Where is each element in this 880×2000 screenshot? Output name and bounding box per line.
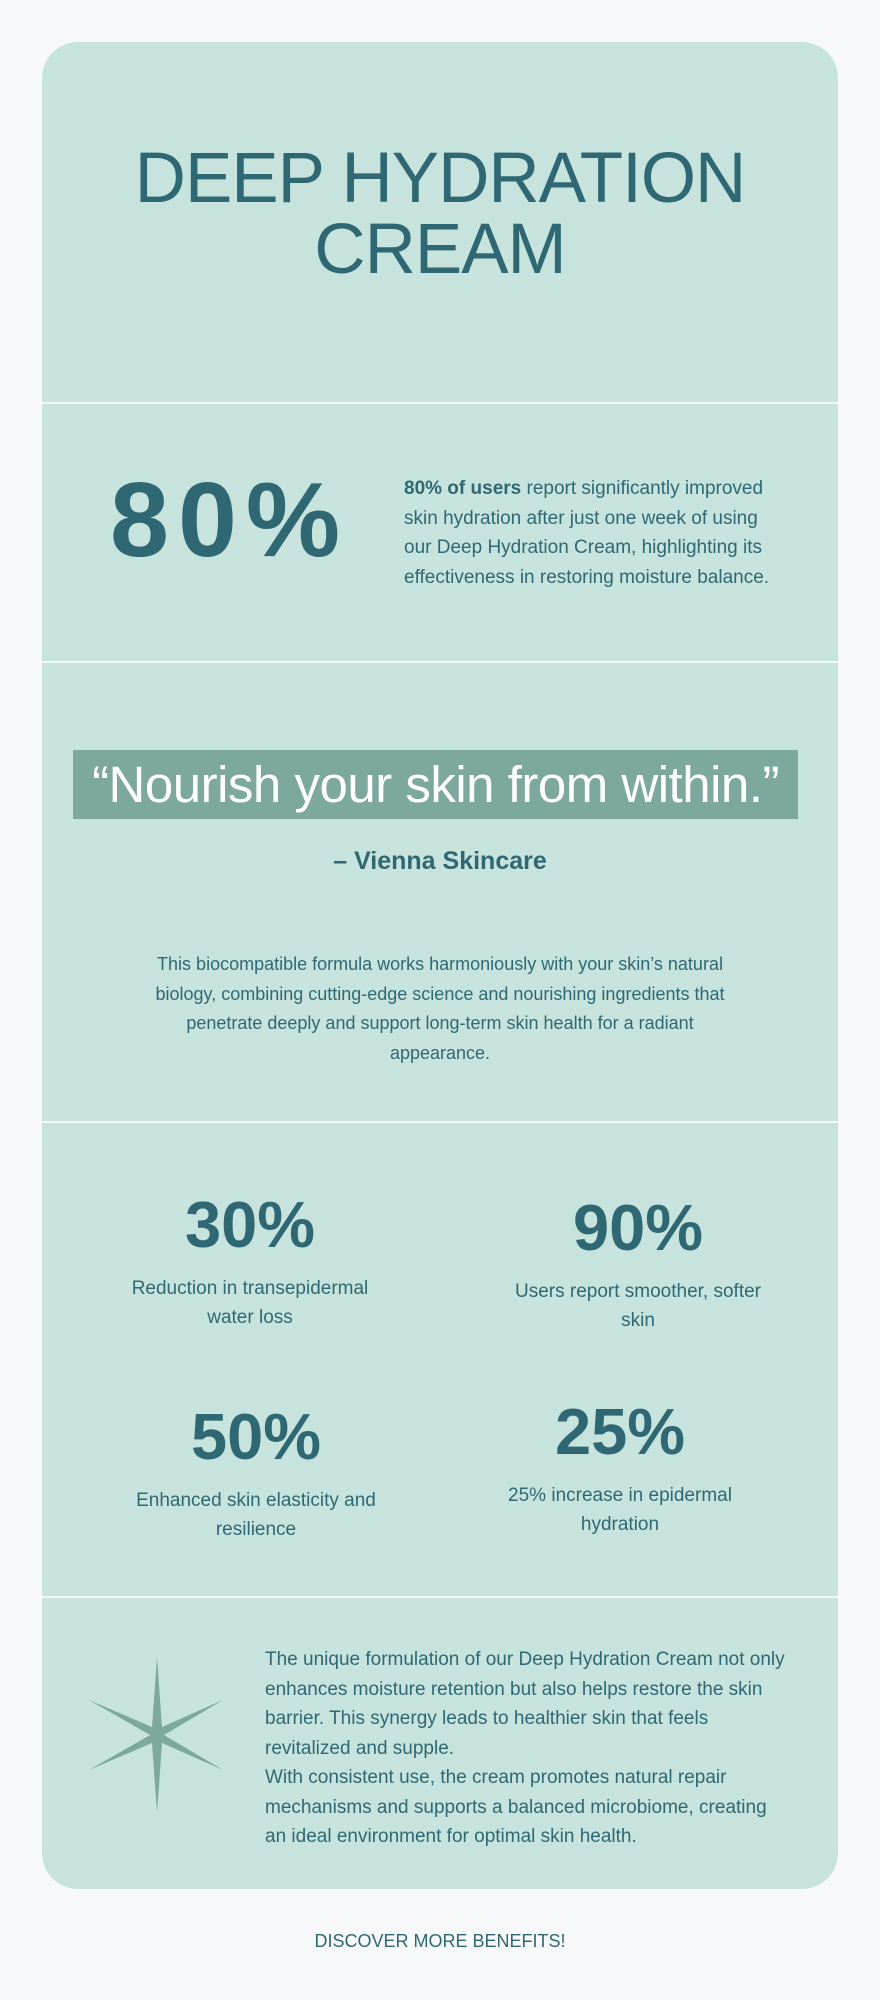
- closing paragraph: With consistent use, the cream promotes natural repair mechanisms and supports a balanced microbiome, creating an ideal environment for optimal skin health.: [265, 1767, 767, 1847]
- closing paragraph: The unique formulation of our Deep Hydration Cream not only enhances moisture retention but also helps restore the skin barrier. This synergy leads to healthier skin that feels revitalized and supple.: [265, 1649, 785, 1758]
- footer call to action: DISCOVER MORE BENEFITS!: [314, 1931, 566, 1951]
- formula paragraph: This biocompatible formula works harmoniously with your skin’s natural biology, combining cutting-edge science and nourishing ingredients that penetrate deeply and support long-term skin health for a radiant appearance.: [155, 954, 725, 1062]
- stat 30%: [132, 1188, 368, 1328]
- title: DEEP HYDRATION: [135, 139, 745, 218]
- stat 50%: resilience: [216, 1519, 296, 1540]
- closing paragraph: [265, 1649, 785, 1847]
- stat 30%: water loss: [207, 1307, 293, 1328]
- quote band: “Nourish your skin from within.”: [92, 756, 779, 813]
- stat 50%: Enhanced skin elasticity and: [136, 1490, 376, 1511]
- stat 30%: Reduction in transepidermal: [132, 1278, 368, 1299]
- stat 30%: 30%: [185, 1188, 315, 1261]
- stat 25%: 25%: [555, 1395, 685, 1468]
- title: [135, 139, 745, 289]
- stat 25%: 25% increase in epidermal: [508, 1485, 732, 1506]
- stat 25%: hydration: [581, 1514, 659, 1535]
- stat 50%: [136, 1400, 376, 1540]
- quote author: – Vienna Skincare: [333, 847, 547, 875]
- stat 90%: Users report smoother, softer: [515, 1281, 761, 1302]
- stat 90%: skin: [621, 1310, 655, 1331]
- stat 90%: [515, 1191, 761, 1331]
- title: CREAM: [314, 210, 566, 289]
- big stat 80%: 80%: [110, 461, 349, 579]
- stat 25%: [508, 1395, 732, 1535]
- stat 90%: 90%: [573, 1191, 703, 1264]
- icon: star: [90, 1658, 222, 1812]
- stat 50%: 50%: [191, 1400, 321, 1473]
- stat description: 80% of users report significantly improved skin hydration after just one week of using our Deep Hydration Cream, highlighting its effectiveness in restoring moisture balance.: [404, 478, 769, 588]
